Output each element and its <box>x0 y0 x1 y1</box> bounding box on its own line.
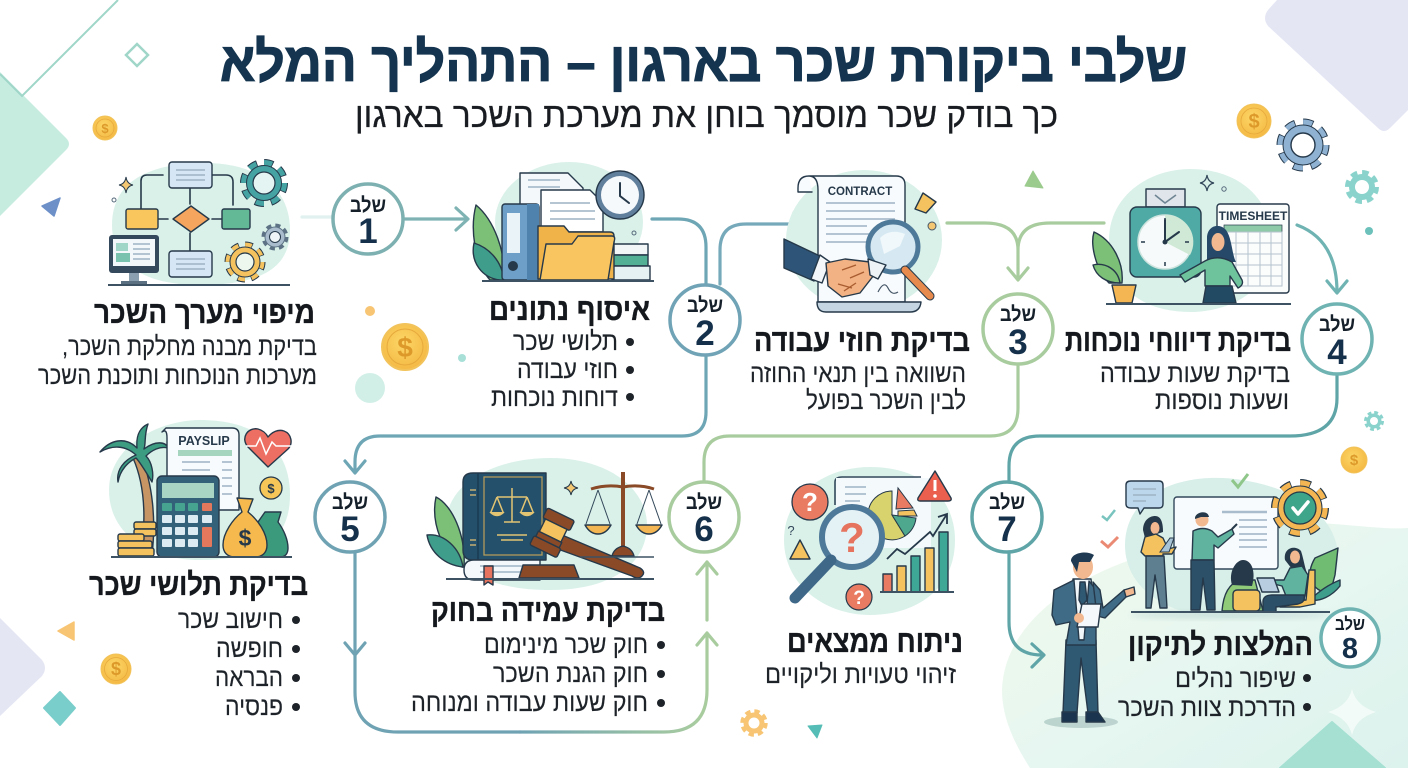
step badge 8: 8 <box>1342 633 1358 665</box>
description: ושעות נוספות <box>1155 385 1289 415</box>
panel: step 5 <box>89 420 308 721</box>
step badge 2: 2 <box>695 314 715 353</box>
step badge 4 <box>1302 304 1372 374</box>
icon: magnifier and charts: ? <box>802 487 818 517</box>
icon: payslip and calculator: $ <box>239 525 252 551</box>
heading: ניתוח ממצאים <box>787 624 963 659</box>
panel: step 7 <box>765 467 963 689</box>
step badge 5 <box>315 482 385 552</box>
icon: team and consultant <box>1044 474 1340 728</box>
panel: step 4 <box>1065 169 1291 415</box>
heading: בדיקת דיווחי נוכחות <box>1065 323 1291 358</box>
step badge 3 <box>983 294 1053 364</box>
background decorations: $ <box>1248 111 1260 133</box>
panel: step 8 <box>1044 474 1340 728</box>
bullet list: שיפור נהלים <box>1175 663 1296 693</box>
bullet list <box>178 604 300 721</box>
step badge 5: שלב <box>332 491 368 514</box>
icon: contract handshake <box>784 170 942 312</box>
heading: בדיקת חוזי עבודה <box>754 323 970 358</box>
icon: law book and gavel <box>427 458 662 590</box>
heading: המלצות לתיקון <box>1128 627 1313 662</box>
step badge 7: שלב <box>989 491 1025 514</box>
heading: בדיקת עמידה בחוק <box>431 593 665 628</box>
step badge 8: שלב <box>1335 614 1365 634</box>
icon: magnifier and charts: ? <box>853 588 865 609</box>
background decorations: $ <box>397 332 413 363</box>
panel: step 2 <box>473 162 654 412</box>
description <box>38 331 317 390</box>
panel: step 6 <box>411 458 665 717</box>
description: מערכות הנוכחות ותוכנת השכר <box>38 360 317 390</box>
step badge 6: 6 <box>694 510 714 549</box>
bullet list: הדרכת צוות השכר <box>1118 692 1296 722</box>
description <box>750 358 966 415</box>
step badge 7 <box>972 482 1042 552</box>
icon: payroll flowchart <box>108 162 290 285</box>
background decorations: $ <box>1350 452 1359 469</box>
panel: step 3 <box>750 170 970 415</box>
title: שלבי ביקורת שכר בארגון – התהליך המלא <box>220 31 1187 93</box>
background decorations: $ <box>111 659 121 679</box>
step badge 6: שלב <box>686 491 722 514</box>
bullet list <box>1118 663 1311 722</box>
step badge 4: שלב <box>1319 313 1355 336</box>
bullet list <box>491 326 634 412</box>
step badge 4: 4 <box>1327 333 1347 372</box>
step badge 3: שלב <box>1000 303 1036 326</box>
icon: magnifier and charts <box>784 467 955 615</box>
bullet list: חופשה <box>216 633 283 663</box>
step badge 3: 3 <box>1008 323 1028 362</box>
description: השוואה בין תנאי החוזה <box>750 358 966 388</box>
bullet list: פנסיה <box>225 691 283 721</box>
step badge 1: 1 <box>358 212 378 251</box>
icon: payslip and calculator <box>100 420 292 560</box>
icon: documents and folder <box>473 162 654 282</box>
icon: payslip and calculator: PAYSLIP <box>178 434 230 448</box>
bullet list: תלושי שכר <box>513 326 618 356</box>
panel: step 1 <box>38 162 317 390</box>
bullet list: חוזי עבודה <box>517 354 618 384</box>
bullet list: חוק שכר מינימום <box>484 629 648 659</box>
heading: בדיקת תלושי שכר <box>89 567 308 602</box>
description: בדיקת מבנה מחלקת השכר, <box>62 331 317 361</box>
subtitle: כך בודק שכר מוסמך בוחן את מערכת השכר בארגון <box>355 96 1058 135</box>
icon: time clock and timesheet <box>1093 169 1291 312</box>
description: בדיקת שעות עבודה <box>1100 358 1290 388</box>
icon: contract handshake: CONTRACT <box>828 186 892 198</box>
step badge 6 <box>669 482 739 552</box>
bullet list: חוק הגנת השכר <box>493 658 648 688</box>
description: לבין השכר בפועל <box>806 385 966 415</box>
bullet list: דוחות נוכחות <box>491 382 618 412</box>
icon: payslip and calculator: $ <box>267 481 275 496</box>
icon: time clock and timesheet: TIMESHEET <box>1219 209 1288 223</box>
heading: איסוף נתונים <box>489 292 650 327</box>
step badge 2 <box>670 285 740 355</box>
bullet list: חישוב שכר <box>178 604 283 634</box>
step badge 7: 7 <box>997 510 1017 549</box>
step badge 1: שלב <box>350 194 386 217</box>
icon: magnifier and charts: ? <box>787 523 795 538</box>
step badge 8 <box>1321 609 1379 667</box>
step badge 2: שלב <box>687 294 723 317</box>
description: זיהוי טעויות וליקויים <box>765 659 957 689</box>
bullet list: חוק שעות עבודה ומנוחה <box>411 687 648 717</box>
bullet list: הבראה <box>215 662 283 692</box>
bullet list <box>411 629 665 717</box>
background decorations: $ <box>101 121 109 136</box>
step badge 1 <box>333 184 403 254</box>
step badge 5: 5 <box>340 510 360 549</box>
arrow: flow connectors <box>302 208 1347 732</box>
heading: מיפוי מערך השכר <box>94 295 315 330</box>
description <box>1100 358 1290 415</box>
icon: magnifier and charts: ? <box>839 514 865 561</box>
